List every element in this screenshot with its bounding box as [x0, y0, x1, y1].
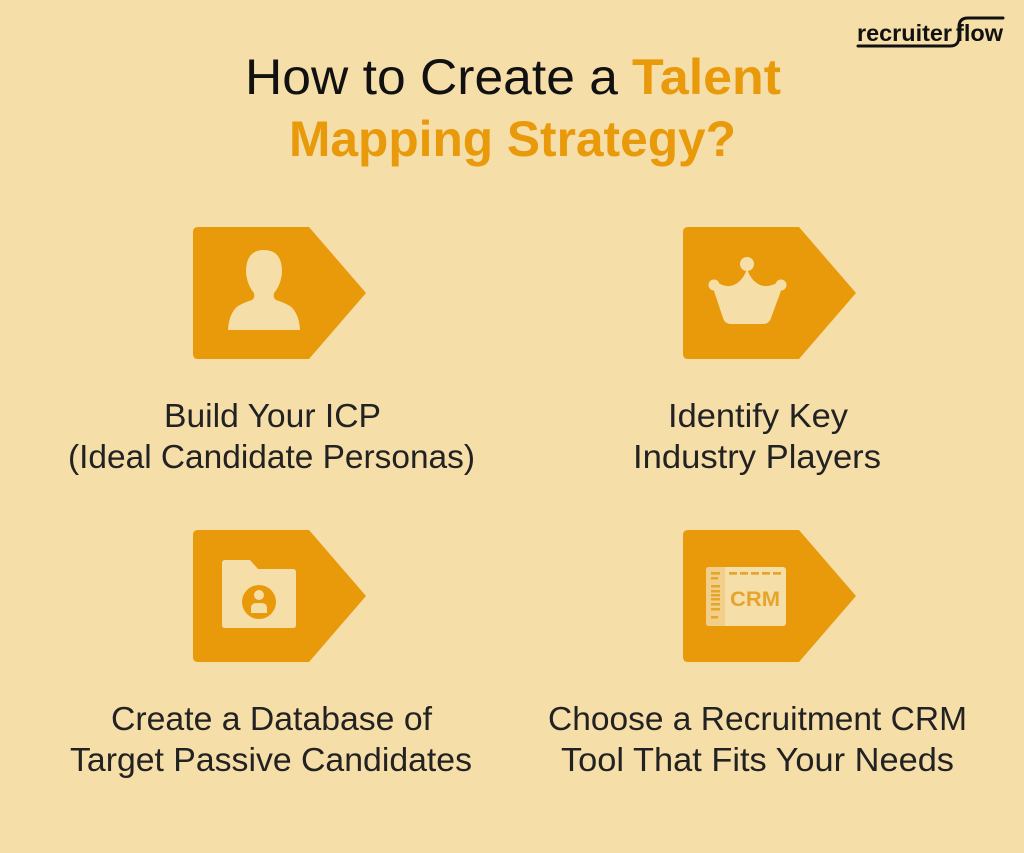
logo: recruiterflow: flow — [956, 20, 1003, 46]
logo: recruiterflow — [857, 18, 1003, 46]
title: Mapping Strategy? — [289, 111, 736, 167]
label: choose a CRM: Tool That Fits Your Needs — [561, 741, 954, 778]
label: identify key players: Identify Key — [668, 397, 849, 434]
label: create a database: Target Passive Candidates — [70, 741, 472, 778]
icon: CRM window — [706, 567, 786, 626]
arrow badge: choose a CRM — [683, 530, 856, 662]
label: create a database: Create a Database of — [111, 700, 433, 737]
panel: identify key industry players — [633, 227, 881, 475]
icon: person — [228, 250, 300, 330]
label: identify key players: Industry Players — [633, 438, 881, 475]
logo: recruiterflow: recruiter — [857, 20, 952, 46]
arrow badge: create a database — [193, 530, 366, 662]
panel: build your ICP — [68, 227, 475, 475]
label: choose a CRM — [548, 700, 967, 778]
icon: crown — [708, 257, 786, 324]
label: build your ICP: (Ideal Candidate Personas) — [68, 438, 475, 475]
icon: folder with person — [222, 560, 296, 628]
label: create a database — [70, 700, 472, 778]
panel: choose a recruitment CRM — [548, 530, 967, 778]
panel: create a database — [70, 530, 472, 778]
arrow badge: identify key players — [683, 227, 856, 359]
title: How to Create a — [245, 49, 618, 105]
label: build your ICP — [68, 397, 475, 475]
title — [245, 49, 781, 167]
title: Talent — [632, 49, 781, 105]
icon: CRM window: CRM — [730, 588, 780, 611]
arrow badge: build your ICP — [193, 227, 366, 359]
label: choose a CRM: Choose a Recruitment CRM — [548, 700, 967, 737]
label: identify key players — [633, 397, 881, 475]
label: build your ICP: Build Your ICP — [164, 397, 381, 434]
